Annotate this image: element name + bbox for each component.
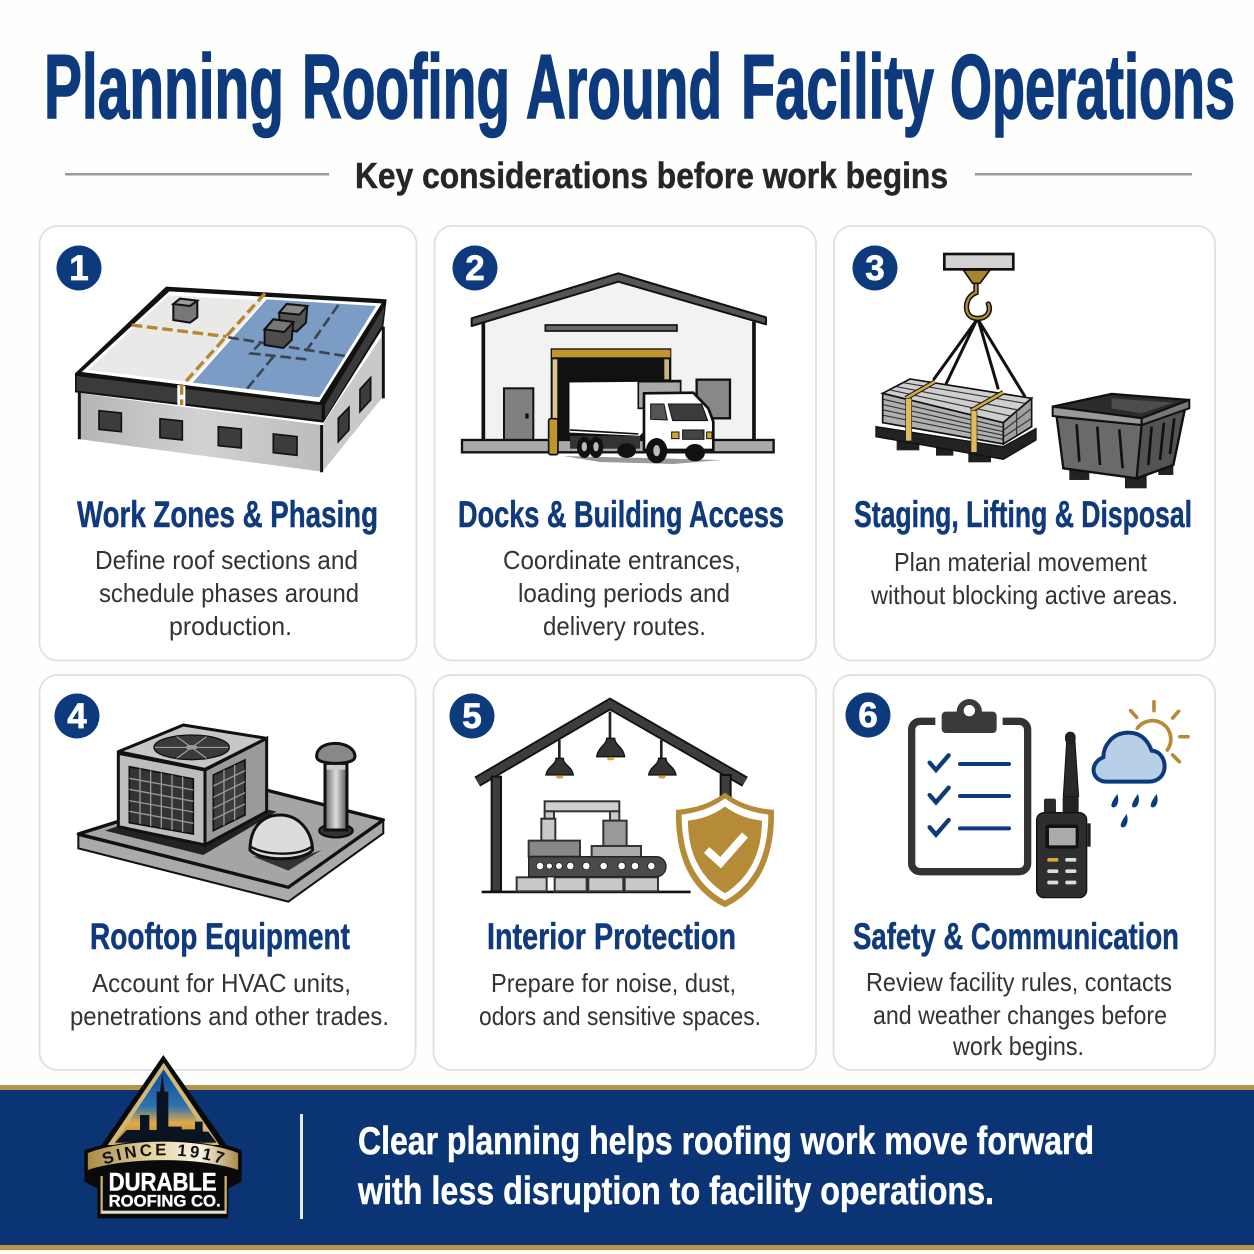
icon: crane, lumber and dumpster [876, 254, 1189, 488]
badge 5 [450, 694, 494, 738]
badge 1: 1 [69, 249, 89, 288]
icon: warehouse and truck [462, 273, 774, 464]
badge 4: 4 [67, 697, 87, 736]
body 6: work begins. [952, 1031, 1084, 1061]
body 1: production. [169, 611, 292, 641]
icon: roof with work zones [75, 287, 387, 472]
body 3: Plan material movement [894, 547, 1148, 577]
banner message: Clear planning helps roofing work move forward [358, 1120, 1094, 1163]
body 4: penetrations and other trades. [70, 1001, 389, 1031]
body 6: and weather changes before [873, 1000, 1167, 1030]
badge 3: 3 [865, 249, 885, 288]
body 4 [70, 968, 389, 1031]
badge 4 [54, 694, 100, 738]
body 4: Account for HVAC units, [92, 968, 351, 998]
body 2: loading periods and [518, 578, 730, 608]
icon: clipboard, radio and weather [912, 699, 1188, 898]
panel 4: rooftop equipment [40, 675, 416, 1070]
panel 6: safety and communication [834, 675, 1215, 1070]
icon: HVAC unit and vents [78, 725, 383, 902]
badge 3 [852, 246, 898, 290]
title [44, 37, 1235, 138]
badge 1 [56, 246, 102, 290]
heading 4: Rooftop Equipment [90, 916, 350, 957]
badge 6: 6 [858, 696, 878, 735]
body 1 [95, 545, 359, 641]
body 1: schedule phases around [99, 578, 359, 608]
badge 6 [846, 692, 890, 738]
icon: facility interior with shield [477, 704, 774, 907]
heading 2: Docks & Building Access [458, 494, 784, 535]
body 6: Review facility rules, contacts [866, 967, 1172, 997]
banner message: with less disruption to facility operations. [357, 1170, 994, 1213]
badge 2: 2 [465, 249, 485, 288]
body 3 [870, 547, 1178, 610]
logo: Durable Roofing Co.: SINCE 1917 [102, 1144, 225, 1164]
body 5: odors and sensitive spaces. [479, 1001, 761, 1031]
body 2: delivery routes. [543, 611, 706, 641]
banner message [357, 1120, 1094, 1213]
body 1: Define roof sections and [95, 545, 358, 575]
heading 5: Interior Protection [487, 916, 736, 957]
body 3: without blocking active areas. [870, 580, 1178, 610]
title: Facility [741, 37, 934, 138]
badge 5: 5 [462, 697, 482, 736]
panel 1: work zones [40, 226, 416, 660]
panel 3: staging [834, 226, 1215, 660]
badge 2 [452, 246, 498, 290]
body 5 [479, 968, 761, 1031]
logo: Durable Roofing Co.: DURABLE [109, 1168, 217, 1196]
panel 5: interior protection [434, 675, 816, 1070]
body 2 [503, 545, 741, 641]
body 2: Coordinate entrances, [503, 545, 741, 575]
title: Planning [44, 37, 284, 138]
body 5: Prepare for noise, dust, [491, 968, 736, 998]
title: Roofing [302, 37, 510, 138]
logo: Durable Roofing Co. [84, 1055, 242, 1218]
footer banner [0, 1085, 1254, 1250]
subtitle with rules: Key considerations before work begins [355, 155, 948, 196]
body 6 [866, 967, 1172, 1061]
logo: Durable Roofing Co.: ROOFING CO. [109, 1191, 221, 1210]
panel 2: docks [434, 226, 816, 660]
heading 1: Work Zones & Phasing [77, 494, 378, 535]
title: Around [526, 37, 722, 138]
